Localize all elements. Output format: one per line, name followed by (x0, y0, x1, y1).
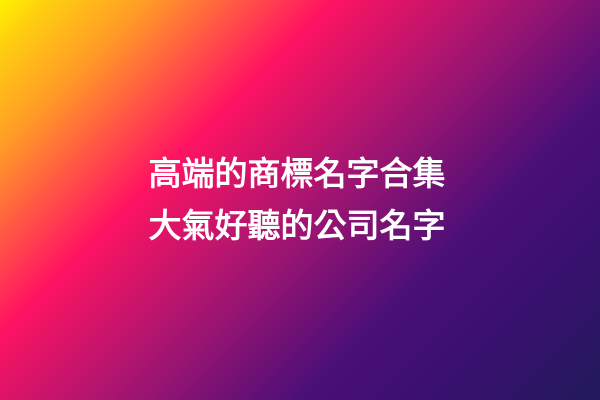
title (148, 155, 446, 244)
title: 大氣好聽的公司名字 (148, 207, 446, 244)
title: 高端的商標名字合集 (148, 155, 446, 192)
